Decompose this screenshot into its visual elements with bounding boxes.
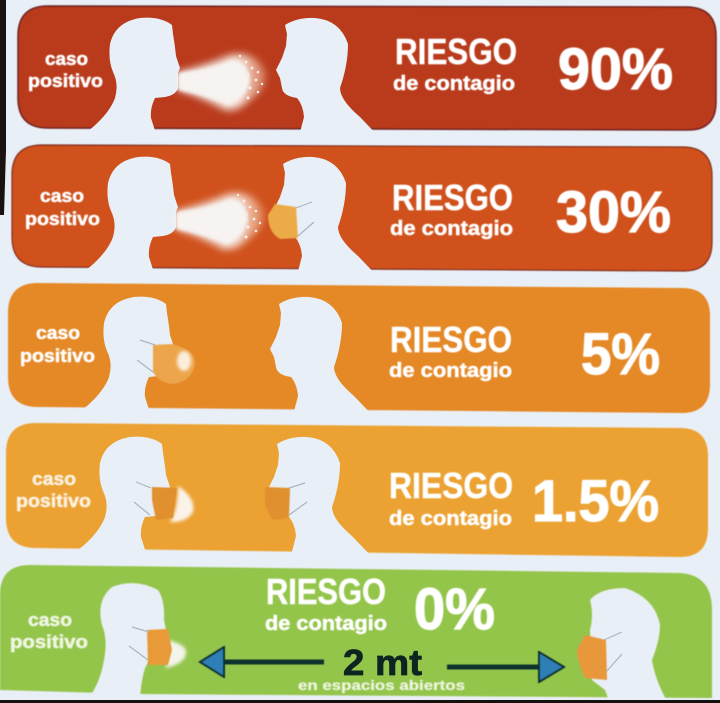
dark bottom edge: [0, 700, 720, 703]
riesgo label: de contagio: [389, 508, 512, 530]
arrow: right: [447, 652, 564, 682]
caso positivo label: caso: [40, 186, 84, 206]
percentage: 30%: [556, 180, 671, 245]
panel: riesgo 30%: [12, 145, 712, 279]
icon: exposed person: [270, 297, 376, 419]
icon: exposed person: [590, 588, 668, 703]
caso positivo label: positivo: [10, 632, 88, 652]
riesgo label: RIESGO: [392, 177, 513, 218]
riesgo label: de contagio: [393, 73, 515, 95]
caso positivo label: caso: [36, 323, 80, 343]
icon: mask on exposed person: [577, 632, 622, 680]
caso positivo label: positivo: [20, 346, 95, 366]
caso positivo label: positivo: [16, 491, 91, 511]
caso positivo label: [20, 323, 95, 366]
riesgo label: de contagio: [390, 218, 513, 240]
icon: cough spray: [178, 54, 265, 110]
percentage: 1.5%: [532, 469, 659, 534]
caso positivo label: [25, 186, 100, 229]
riesgo label: [389, 465, 513, 530]
percentage: 5%: [581, 322, 660, 387]
panel: riesgo 0% a 2 metros: [0, 565, 712, 703]
dark left edge: [0, 0, 6, 215]
caso positivo label: caso: [28, 610, 72, 630]
caso positivo label: [28, 49, 103, 91]
icon: infected person: [66, 437, 170, 559]
panel: riesgo 1.5%: [6, 423, 708, 559]
riesgo label: [265, 571, 387, 635]
icon: infected person: [85, 583, 166, 703]
riesgo label: de contagio: [389, 360, 512, 382]
icon: mask on infected person: [134, 482, 193, 522]
icon: infected person: [74, 157, 178, 279]
icon: exposed person: [274, 157, 380, 279]
riesgo label: RIESGO: [389, 465, 513, 506]
icon: mask on exposed person: [265, 483, 307, 520]
percentage: 0%: [414, 577, 495, 642]
caso positivo label: caso: [45, 49, 88, 69]
percentage: 90%: [558, 37, 673, 102]
icon: exposed person: [276, 18, 382, 140]
caso positivo label: positivo: [28, 71, 103, 91]
icon: mask on infected person: [129, 627, 186, 668]
icon: exposed person: [268, 437, 374, 559]
riesgo label: de contagio: [265, 613, 387, 635]
icon: infected person: [70, 297, 174, 419]
arrow: left: [200, 647, 324, 677]
distance label: 2 mt: [343, 642, 422, 683]
riesgo label: RIESGO: [266, 571, 386, 612]
icon: cough spray: [176, 193, 263, 249]
riesgo label: RIESGO: [390, 319, 512, 360]
caso positivo label: [10, 610, 88, 652]
riesgo label: [390, 177, 513, 240]
riesgo label: RIESGO: [395, 31, 517, 72]
riesgo label: [389, 319, 512, 382]
panel: riesgo 90%: [18, 6, 716, 140]
panel: riesgo 5%: [8, 283, 710, 419]
caso positivo label: [16, 469, 91, 511]
icon: mask with contained breath: [137, 340, 195, 384]
open-air note: en espacios abiertos: [298, 677, 465, 693]
caso positivo label: positivo: [25, 209, 100, 229]
icon: mask on exposed person: [268, 202, 314, 239]
riesgo label: [393, 31, 517, 95]
icon: infected person: [76, 18, 180, 140]
caso positivo label: caso: [32, 469, 76, 489]
